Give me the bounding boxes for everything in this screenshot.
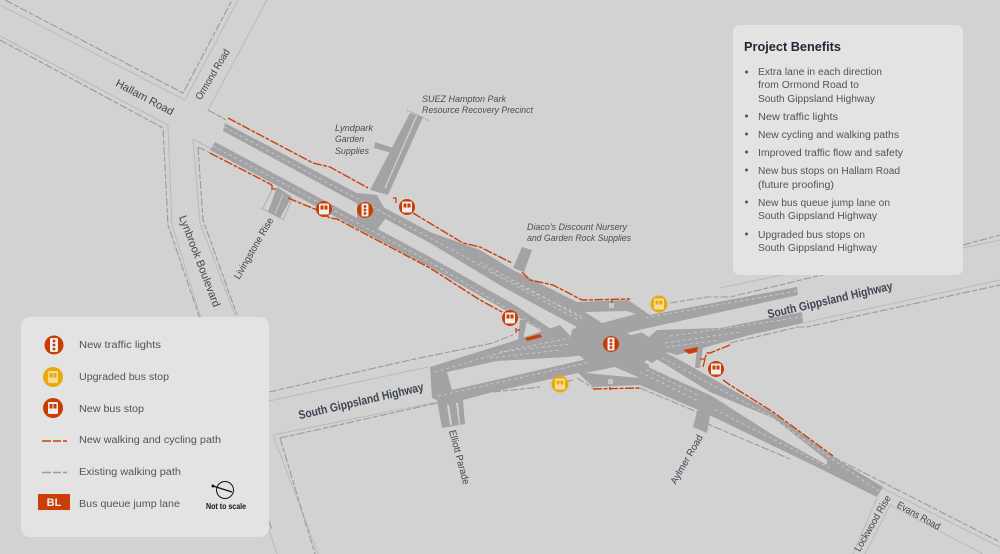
road label: Ormond Road: Ormond Road <box>194 48 233 102</box>
place label: SUEZ Hampton Park: Resource Recovery Precinct <box>422 105 533 115</box>
icon: new bus stop south-east of intersection <box>708 361 724 377</box>
road label: Elliott Parade: Elliott Parade <box>446 429 471 486</box>
benefits list: New bus stops on Hallam Road <box>758 166 900 177</box>
benefits list: New cycling and walking paths <box>758 130 899 141</box>
place label: Diaco's Discount Nursery: Diaco's Discount Nursery <box>527 222 627 232</box>
benefits list: from Ormond Road to <box>758 80 859 91</box>
legend: existing walking path <box>42 467 181 478</box>
legend: bus queue jump lane: BL <box>47 497 62 509</box>
icon: new traffic lights (main intersection) <box>603 336 619 352</box>
legend: bus queue jump lane: Bus queue jump lane <box>79 499 180 510</box>
benefits list: (future proofing) <box>758 180 834 191</box>
side roads <box>261 110 712 433</box>
new walking and cycling paths <box>210 118 833 456</box>
legend: upgraded bus stop: Upgraded bus stop <box>79 372 169 383</box>
place label: Diaco's Discount Nursery: and Garden Rock Supplies <box>527 233 631 243</box>
place label: SUEZ Hampton Park <box>422 94 533 115</box>
place label: Lyndpark Garden Supplies: Garden <box>335 134 364 144</box>
road works: South Gippsland Highway west arm <box>430 325 600 428</box>
road works: central intersection <box>507 293 673 387</box>
icon: new bus stop east of Lyndpark <box>399 199 415 215</box>
icon: new bus stop north-west of intersection <box>502 310 518 326</box>
legend: new traffic lights <box>44 336 161 354</box>
place label: SUEZ Hampton Park: SUEZ Hampton Park <box>422 94 506 104</box>
place label: Lyndpark Garden Supplies: Lyndpark <box>335 123 374 133</box>
road works: Hallam Road north-west arm <box>210 123 612 350</box>
benefits list <box>745 67 903 254</box>
road label: South Gippsland Highway east: South Gippsland Highway <box>766 279 894 321</box>
place label: Diaco's Discount Nursery <box>527 222 631 243</box>
heading: project benefits: Project Benefits <box>744 39 841 54</box>
legend: new traffic lights: New traffic lights <box>79 340 161 351</box>
legend: new bus stop: New bus stop <box>79 404 144 415</box>
north arrow and not to scale note: Not to scale <box>206 502 246 511</box>
benefits list: South Gippsland Highway <box>758 94 875 105</box>
place label: Lyndpark Garden Supplies <box>335 123 374 156</box>
place label: Lyndpark Garden Supplies: Supplies <box>335 146 369 156</box>
road label: Aylmer Road: Aylmer Road <box>669 433 706 486</box>
panel: legend <box>21 317 269 537</box>
north arrow and not to scale note <box>206 482 246 511</box>
benefits list: South Gippsland Highway <box>758 243 877 254</box>
road label: Lynbrook Boulevard: Lynbrook Boulevard <box>176 214 222 309</box>
benefits list: New traffic lights <box>758 112 838 123</box>
legend: existing walking path: Existing walking path <box>79 467 181 478</box>
benefits list: Improved traffic flow and safety <box>758 148 903 159</box>
benefits list: New bus queue jump lane on <box>758 198 890 209</box>
legend: bus queue jump lane <box>38 494 180 510</box>
legend: new bus stop <box>43 398 144 418</box>
road label: South Gippsland Highway west: South Gippsland Highway <box>297 380 425 422</box>
road label: Hallam Road: Hallam Road <box>113 78 176 118</box>
road label: Livingstone Rise: Livingstone Rise <box>232 216 277 281</box>
road works: South Gippsland Highway east arm <box>597 287 803 355</box>
panel: project benefits <box>733 25 963 275</box>
benefits list: Upgraded bus stops on <box>758 230 865 241</box>
icon: upgraded bus stop south-west <box>552 376 568 392</box>
road works: south-east arm <box>590 310 883 497</box>
legend: upgraded bus stop <box>43 367 169 387</box>
icon: new bus stop west of Lyndpark <box>316 201 332 217</box>
road label: Evans Road: Evans Road <box>895 500 942 533</box>
bus queue jump lane markers <box>525 334 698 354</box>
icon: new traffic lights (north) <box>357 202 373 218</box>
road label: Lockwood Rise: Lockwood Rise <box>853 493 894 554</box>
legend: new walking and cycling path: New walking and cycling path <box>79 435 221 446</box>
icon: upgraded bus stop north-east <box>650 296 668 312</box>
benefits list: Extra lane in each direction <box>758 67 882 78</box>
benefits list: South Gippsland Highway <box>758 211 877 222</box>
